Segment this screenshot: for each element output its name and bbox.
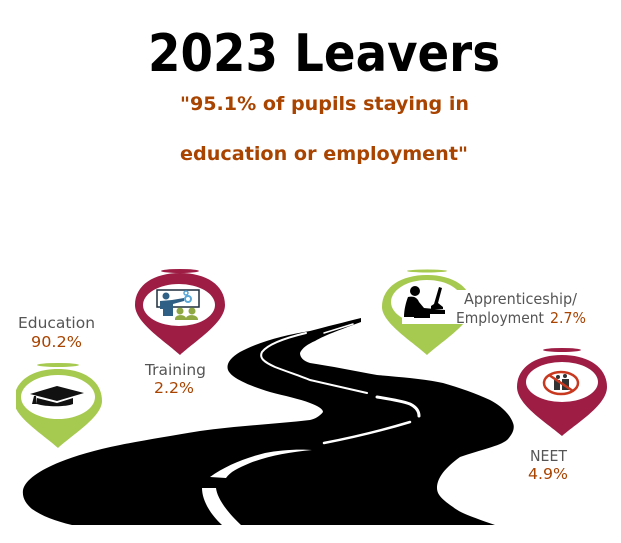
label: training: Training [144,361,206,379]
pin: training [135,269,225,355]
subtitle quote: education or employment" [180,143,468,165]
label: training [144,361,206,397]
label: education: Education [18,314,95,332]
label: education [18,314,95,351]
label: training: 2.2% [154,379,194,397]
winding road [23,318,514,525]
label: NEET: NEET [530,447,567,465]
icon: no people [544,372,578,394]
icon: graduation cap [30,386,84,406]
apprenticeship label backing [402,290,478,324]
pin: apprenticeship and employment [382,270,472,355]
subtitle quote [180,93,469,165]
label: NEET [528,447,568,483]
icon: trainer at board [157,290,199,320]
lower road marking [210,450,312,478]
title: 2023 Leavers [148,24,500,84]
label: apprenticeship and employment: Employment [456,309,544,327]
icon: person at desk [404,286,445,318]
label: apprenticeship and employment [456,290,586,327]
label: apprenticeship and employment: 2.7% [550,309,586,327]
lower road curve marking [202,488,241,525]
label: apprenticeship and employment: Apprenticeship/ [464,290,578,308]
label: education: 90.2% [31,333,82,351]
pin: NEET [517,348,607,436]
road markings [261,324,419,443]
subtitle quote: "95.1% of pupils staying in [180,93,469,115]
pin: education [14,363,102,448]
label: NEET: 4.9% [528,465,568,483]
